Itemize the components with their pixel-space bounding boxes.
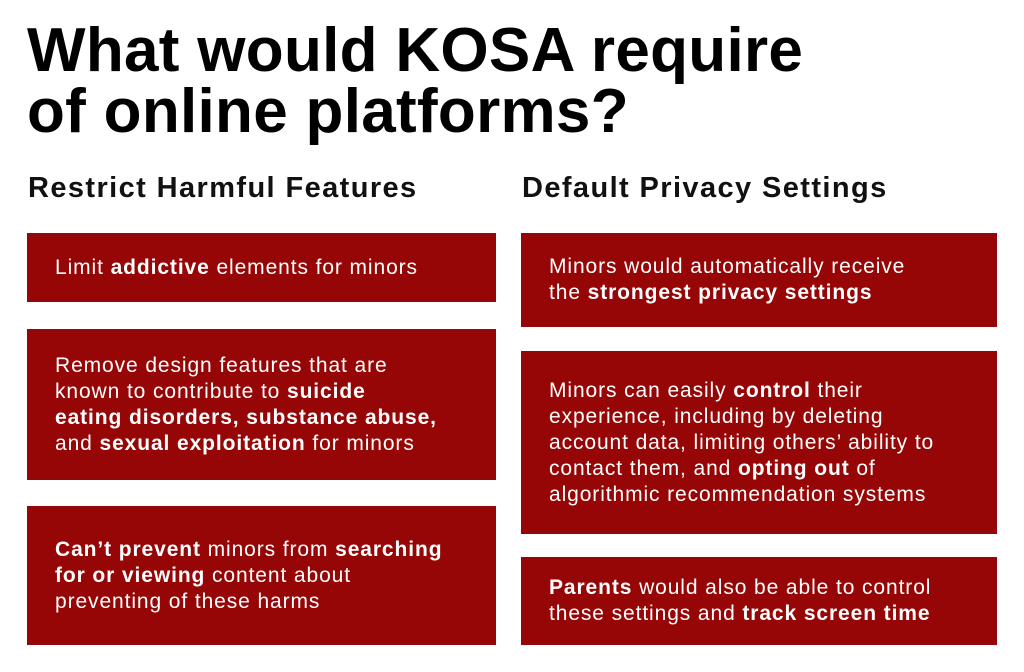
box: control experience	[521, 351, 997, 534]
box: control experience: account data, limiting others’ ability to	[549, 430, 934, 454]
box: strongest privacy: Minors would automatically receive	[549, 255, 905, 278]
box: parents: these settings and track screen time	[549, 602, 930, 625]
box: strongest privacy	[521, 233, 997, 327]
box: strongest privacy: the strongest privacy settings	[549, 281, 872, 304]
box: remove design features: and sexual exploitation for minors	[55, 432, 415, 454]
box: parents	[521, 557, 997, 645]
heading: default privacy settings: Default Privacy Settings	[522, 172, 888, 204]
box: can't prevent searching: preventing of these harms	[55, 590, 320, 612]
box: remove design features	[27, 329, 496, 480]
box: remove design features: known to contribute to suicide	[55, 380, 366, 402]
box: can't prevent searching	[27, 506, 496, 645]
box: control experience: experience, including by deleting	[549, 404, 883, 428]
box: remove design features: eating disorders, substance abuse,	[55, 406, 437, 428]
title: What would KOSA require	[27, 16, 803, 85]
box: limit addictive	[27, 233, 496, 302]
box: parents: Parents would also be able to control	[549, 576, 931, 599]
title: of online platforms?	[27, 77, 629, 146]
box: remove design features: Remove design features that are	[55, 354, 388, 376]
box: limit addictive: Limit addictive elements for minors	[55, 256, 418, 278]
title	[27, 16, 803, 146]
box: can't prevent searching: Can’t prevent minors from searching	[55, 538, 442, 560]
box: control experience: contact them, and opting out of	[549, 456, 876, 480]
box: control experience: Minors can easily control their	[549, 378, 863, 402]
box: control experience: algorithmic recommendation systems	[549, 482, 926, 506]
heading: restrict harmful features: Restrict Harmful Features	[28, 172, 418, 204]
box: can't prevent searching: for or viewing content about	[55, 564, 351, 586]
